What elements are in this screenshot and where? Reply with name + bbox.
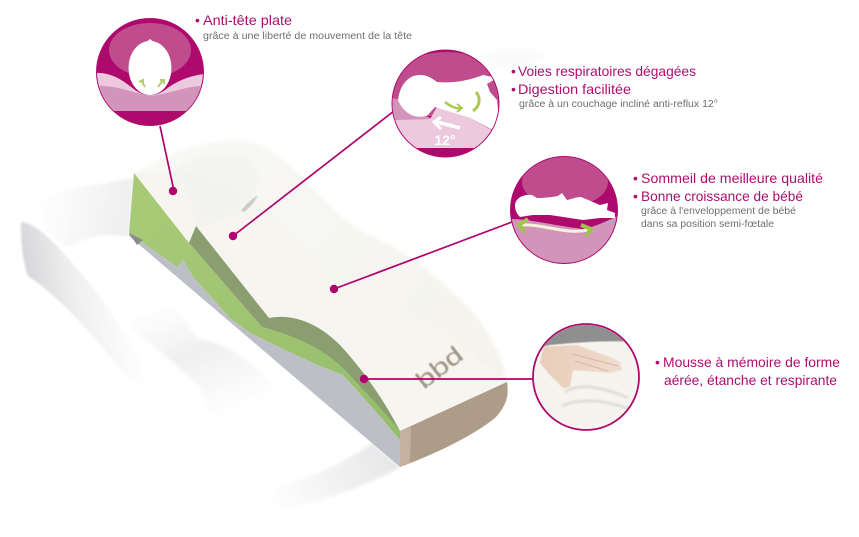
- text block: voies respiratoires: Digestion facilitée: [518, 81, 631, 97]
- mattress illustration: [129, 140, 508, 467]
- text block: anti-tête plate: grâce à une liberté de mouvement de la tête: [203, 31, 412, 42]
- olive cut edge: [189, 226, 400, 431]
- icon: head circle: [96, 18, 204, 126]
- photo: hand on memory foam: [530, 320, 642, 432]
- text block: mousse: aérée, étanche et respirante: [664, 372, 837, 388]
- text block: sommeil: Sommeil de meilleure qualité: [641, 170, 823, 186]
- ghost reflection of the mattress: [21, 50, 550, 513]
- text block: sommeil: dans sa position semi-fœtale: [641, 219, 774, 230]
- text block: voies respiratoires: •: [511, 81, 516, 97]
- connector lines and dots: [160, 111, 534, 383]
- text block: voies respiratoires: [511, 63, 718, 110]
- text block: sommeil: •: [633, 170, 638, 186]
- text block: mousse: •: [655, 354, 660, 370]
- text block: sommeil: Bonne croissance de bébé: [641, 188, 803, 204]
- text block: voies respiratoires: •: [511, 63, 516, 79]
- text block: voies respiratoires: grâce à un couchage incliné anti-reflux 12°: [519, 99, 718, 110]
- icon: inclined baby circle: [392, 50, 500, 158]
- front brown side: [400, 382, 508, 467]
- text block: anti-tête plate: •: [195, 12, 200, 28]
- text block: anti-tête plate: [195, 12, 412, 42]
- text block: sommeil: grâce à l'enveloppement de bébé: [641, 206, 796, 217]
- text block: mousse: Mousse à mémoire de forme: [663, 354, 840, 370]
- text block: voies respiratoires: Voies respiratoires dégagées: [518, 63, 696, 79]
- text block: sommeil: •: [633, 188, 638, 204]
- text block: mousse: [655, 354, 840, 388]
- shaded head hollow: [175, 154, 258, 226]
- text block: sommeil: [633, 170, 823, 230]
- grey base layer: [129, 233, 400, 467]
- text block: anti-tête plate: Anti-tête plate: [203, 12, 292, 28]
- icon: baby lying circle: [510, 156, 620, 265]
- degree label: 12°: [434, 132, 456, 148]
- brand logo: bbd: [411, 341, 469, 395]
- mattress top surface: [134, 140, 507, 431]
- green foam section: [129, 173, 400, 440]
